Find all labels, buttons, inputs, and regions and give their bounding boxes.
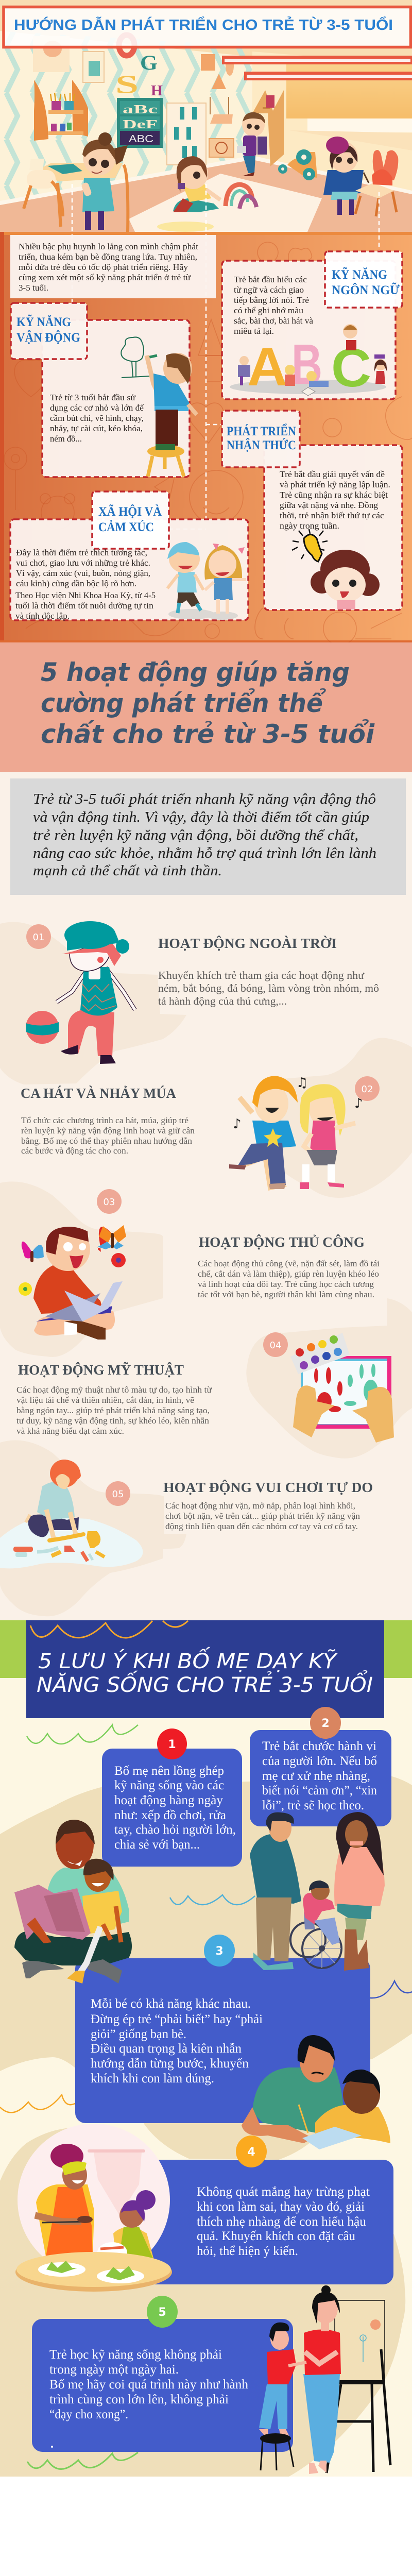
text note 4 bbox=[197, 2185, 370, 2258]
text note 4: Không quát mắng hay trừng phạt bbox=[197, 2185, 370, 2199]
text 04: vật liệu tái chế và thiên nhiên, cắt dán, in hình, vẽ bbox=[16, 1395, 194, 1405]
heading 04: HOẠT ĐỘNG MỸ THUẬT bbox=[18, 1362, 184, 1378]
girl sitting on rug bbox=[173, 156, 220, 212]
activity 01: outdoor bbox=[26, 921, 379, 1064]
text note 2: của người lớn. Nếu bố bbox=[262, 1754, 377, 1768]
text note 5: “dạy cho xong”. bbox=[49, 2408, 128, 2421]
note panel 3 bbox=[75, 1935, 370, 2123]
rug bbox=[129, 174, 322, 232]
decorative squiggle indigo bbox=[370, 1981, 412, 1998]
decorative dashed route lines bbox=[72, 184, 379, 529]
section banner: 5 life skills notes bbox=[26, 1620, 384, 1718]
text 04: Các hoạt động mỹ thuật như tô màu tự do, tạo hình từ bbox=[16, 1385, 212, 1395]
text: cognitive development: thời, trẻ nhận biết thứ tự các bbox=[280, 511, 384, 520]
badge 4: 4 bbox=[247, 2146, 255, 2159]
text note 1: tay, chào hỏi người lớn, bbox=[114, 1823, 236, 1837]
decorative squiggle orange bbox=[0, 2094, 87, 2112]
icon: children with ABC letters bbox=[230, 324, 387, 398]
text: language skills: tiếp bằng lời nói. Trẻ bbox=[234, 295, 309, 305]
heading: social and emotional: XÃ HỘI VÀ bbox=[98, 504, 162, 519]
heading 01: HOẠT ĐỘNG NGOÀI TRỜI bbox=[158, 936, 337, 951]
activity 03: crafts bbox=[19, 1189, 380, 1340]
text: language skills: sắc, bài thơ, bài hát và bbox=[234, 316, 313, 326]
badge 1: 1 bbox=[168, 1738, 176, 1751]
illustration: family with wheelchair bbox=[250, 1812, 385, 1971]
text 04: bằng ngón tay... giúp trẻ phát triển khả năng sáng tạo, bbox=[16, 1405, 210, 1415]
text note 2 bbox=[262, 1739, 377, 1812]
text 02 bbox=[21, 1115, 195, 1156]
heading: language skills: KỸ NĂNG bbox=[332, 267, 387, 282]
text: motor skills: nhảy, tự cài cút, kéo khóa, bbox=[50, 423, 143, 433]
icon: boy reading with butterflies bbox=[19, 1225, 126, 1340]
text note 5: Trẻ học kỹ năng sống không phải bbox=[49, 2348, 222, 2362]
text: motor skills: ném đồ... bbox=[50, 434, 82, 444]
decorative squiggle green bbox=[27, 1725, 138, 1744]
hanging board and peg board bbox=[210, 114, 233, 124]
number badge 05: 05 bbox=[112, 1489, 124, 1500]
wall art frames bbox=[33, 36, 70, 72]
heading: language skills: NGÔN NGỮ bbox=[332, 282, 400, 297]
icon: children singing: ♪ bbox=[233, 1116, 242, 1132]
heading 05: HOẠT ĐỘNG VUI CHƠI TỰ DO bbox=[163, 1480, 373, 1495]
text note 4: hỏi, thể hiện ý kiến. bbox=[197, 2244, 298, 2258]
section banner: 5 activities: 5 hoạt động giúp tăng bbox=[41, 657, 350, 687]
text: social and emotional bbox=[15, 548, 156, 621]
bunny chair bbox=[312, 150, 398, 216]
text note 1: chia sẻ với bạn... bbox=[114, 1838, 200, 1852]
activity 04: art bbox=[16, 1332, 394, 1443]
text note 1 bbox=[114, 1764, 236, 1852]
background doodles bbox=[4, 242, 412, 645]
decorative squiggle green bottom bbox=[27, 2452, 138, 2469]
text note 4: quả. Khuyến khích con đặt câu bbox=[197, 2229, 355, 2243]
panel: child development skills bbox=[0, 184, 412, 645]
heading: cognitive development bbox=[222, 411, 300, 467]
floor bbox=[0, 159, 412, 232]
text note 3: Điều quan trọng là kiên nhẫn bbox=[91, 2042, 242, 2056]
text: motor skills: Trẻ từ 3 tuổi bắt đầu sử bbox=[50, 393, 136, 402]
icon: children with ABC letters: A bbox=[247, 337, 287, 397]
table with paper roll bbox=[24, 159, 128, 232]
decorative banner bar top bbox=[222, 56, 412, 64]
text 01: Khuyến khích trẻ tham gia các hoạt động như bbox=[158, 969, 365, 981]
text note 1: như: xếp đồ chơi, rửa bbox=[114, 1808, 226, 1822]
text: social and emotional: Vì vậy, cảm xúc (vui, buồn, nóng giận, bbox=[16, 568, 150, 578]
panel: classroom illustration: aBc bbox=[123, 103, 158, 116]
intro text box: triển, thua kém bạn bè đồng trang lứa. Tuy nhiên, bbox=[19, 252, 197, 262]
text 05: chơi bột nặn, vẽ trên cát... giúp phát triển kỹ năng vận bbox=[165, 1511, 360, 1521]
text note 3: giỏi” giống bạn bè. bbox=[91, 2027, 186, 2041]
text note 4: khi con làm sai, thay vào đó, giải bbox=[197, 2200, 365, 2214]
icon: child playing with clay bbox=[0, 1460, 143, 1568]
section banner: 5 activities: cường phát triển thể bbox=[41, 688, 327, 718]
icon: light bulb and thinking girl bbox=[292, 529, 380, 609]
text: motor skills: dụng các cơ nhỏ và lớn để bbox=[50, 403, 144, 413]
badge 5: 5 bbox=[158, 2306, 166, 2319]
panel: classroom illustration: G bbox=[140, 51, 158, 74]
icon: children with ABC letters: C bbox=[331, 338, 371, 398]
text note 5: trong ngày một ngày hai. bbox=[49, 2363, 179, 2377]
text: cognitive development bbox=[280, 469, 390, 531]
section banner: 5 activities bbox=[0, 642, 412, 772]
text 02: bằng. Bố mẹ có thể thay phiên nhau hướng dẫn bbox=[21, 1136, 193, 1146]
icon: children with ABC letters: B bbox=[291, 333, 322, 396]
intro text box: 3-5 tuổi. bbox=[19, 283, 48, 293]
text 02: các bước và động tác cho con. bbox=[21, 1146, 128, 1156]
badge 2 bbox=[310, 1707, 341, 1739]
text 01: ném, bắt bóng, đá bóng, làm vòng tròn nhóm, mô bbox=[158, 982, 379, 994]
text note 3: Đừng ép trẻ “phải biết” hay “phải bbox=[91, 2012, 263, 2026]
number badge 05 bbox=[106, 1481, 130, 1506]
badge 4 bbox=[236, 2136, 267, 2167]
text: social and emotional: vui chơi, giao lưu với những trẻ khác. bbox=[16, 558, 150, 568]
decorative banner bar lower bbox=[244, 72, 412, 80]
panel: classroom illustration: DeF bbox=[123, 118, 158, 131]
text: language skills: từ ngữ và cách giao bbox=[234, 285, 304, 295]
heading 02: CA HÁT VÀ NHẢY MÚA bbox=[21, 1086, 176, 1101]
icon: boy and girl holding hands bbox=[167, 542, 246, 620]
note panel 5 bbox=[32, 2296, 293, 2452]
text note 4: thích nhẹ nhàng để con hiểu hậu bbox=[197, 2215, 367, 2229]
number badge 03: 03 bbox=[104, 1197, 115, 1208]
text note 1: hoạt động hàng ngày bbox=[114, 1793, 224, 1807]
text note 2: lỗi”, trẻ sẽ học theo. bbox=[262, 1799, 364, 1812]
number badge 04: 04 bbox=[270, 1340, 281, 1351]
intro text box: physical development: trẻ rèn luyện kỹ năng vận động, bồi dưỡng thể chất, bbox=[33, 827, 358, 843]
text 03 bbox=[198, 1259, 380, 1299]
badge 2: 2 bbox=[321, 1717, 330, 1730]
text note 2: Trẻ bắt chước hành vi bbox=[262, 1739, 376, 1753]
panel: classroom illustration: ABC bbox=[129, 133, 153, 145]
panel: cognitive development bbox=[222, 411, 402, 610]
text note 5: trình cùng con lớn lên, không phải bbox=[49, 2393, 229, 2406]
activity 05: free play bbox=[0, 1460, 373, 1568]
panel: activities background bbox=[0, 772, 412, 1620]
text: language skills bbox=[234, 275, 313, 336]
heading: social and emotional: CẢM XÚC bbox=[98, 520, 154, 534]
illustration: mother and son drawing on easel bbox=[259, 2285, 390, 2474]
icon: handprints and watercolor palette bbox=[290, 1333, 394, 1443]
badge 3 bbox=[204, 1935, 235, 1967]
badge 5 bbox=[147, 2296, 178, 2328]
text: motor skills: cầm bút chì, vẽ hình, chạy, bbox=[50, 413, 144, 423]
title banner bbox=[4, 7, 411, 47]
note panel 2 bbox=[250, 1707, 391, 1826]
number badge 02 bbox=[355, 1076, 380, 1101]
text note 1: Bố mẹ nên lồng ghép bbox=[114, 1764, 224, 1778]
intro text box: Nhiều bậc phụ huynh lo lắng con mình chậm phát bbox=[19, 242, 198, 251]
text: cognitive development: Trẻ cũng nhận ra sự khác biệt bbox=[280, 490, 388, 500]
icon: children singing: ♪ bbox=[354, 1096, 363, 1111]
text: cognitive development: và phát triển kỹ năng lập luận. bbox=[280, 480, 390, 489]
badge 1 bbox=[157, 1728, 187, 1759]
text: social and emotional: Đây là thời điểm trẻ thích tương tác, bbox=[16, 548, 147, 557]
section banner: 5 life skills notes: NĂNG SỐNG CHO TRẺ 3-5 TUỔI bbox=[37, 1670, 373, 1697]
intro text box: mỗi đứa trẻ đều có tốc độ phát triển riêng. Hãy bbox=[19, 262, 188, 272]
number badge 03 bbox=[97, 1189, 122, 1214]
intro text box: physical development: Trẻ từ 3-5 tuổi phát triển nhanh kỹ năng vận động thô bbox=[33, 791, 376, 807]
heading 03: HOẠT ĐỘNG THỦ CÔNG bbox=[199, 1234, 365, 1250]
butterfly pink bbox=[22, 1242, 44, 1262]
text: cognitive development: ngày trong tuần. bbox=[280, 521, 339, 531]
rainbow toy bbox=[226, 184, 256, 209]
toy on wheels bbox=[278, 149, 317, 180]
intro text box: physical development bbox=[10, 778, 406, 895]
panel: life skills background bbox=[0, 1620, 412, 2477]
text note 3: hướng dẫn từng bước, khuyến bbox=[91, 2057, 249, 2071]
note panel 1 bbox=[102, 1728, 242, 1867]
heading: motor skills: KỸ NĂNG bbox=[16, 314, 71, 329]
text 04: và khả năng biểu đạt cảm xúc. bbox=[16, 1426, 124, 1436]
intro text box: physical development: nâng cao sức khỏe, nhằm hỗ trợ quá trình lớn lên lành bbox=[33, 845, 376, 861]
icon: children singing: ♫ bbox=[296, 1075, 308, 1091]
intro text box: cùng xem xét một số kỹ năng phát triển ở trẻ từ bbox=[19, 273, 191, 282]
panel: social and emotional skills bbox=[10, 492, 248, 621]
text: language skills: Trẻ bắt đầu hiểu các bbox=[234, 275, 307, 284]
text note 1: kỹ năng sống vào các bbox=[114, 1778, 224, 1792]
text note 3: Mỗi bé có khả năng khác nhau. bbox=[91, 1997, 251, 2011]
text note 5 bbox=[49, 2348, 248, 2421]
activity 02: singing and dancing bbox=[21, 1075, 380, 1189]
butterfly orange bbox=[98, 1225, 126, 1252]
number badge 04 bbox=[263, 1332, 288, 1357]
illustration: mother and daughter cooking bbox=[15, 2124, 172, 2292]
lacing board bbox=[167, 103, 206, 165]
text note 3: khích khi con làm đúng. bbox=[91, 2072, 214, 2086]
text 04: tư duy, kỹ năng vận động tinh, sự khéo léo, kiên nhẫn bbox=[16, 1416, 210, 1426]
text: social and emotional: tuổi là thời điểm tốt nuôi dưỡng tự tin bbox=[15, 601, 154, 611]
intro text box: physical development: và vận động tinh. Vì vậy, đây là thời điểm tốt cần giúp bbox=[33, 809, 369, 825]
text: cognitive development: giữa vật nặng và nhẹ. Đồng bbox=[280, 500, 379, 510]
note panel 4 bbox=[113, 2136, 393, 2284]
illustration: father teaching son to write bbox=[242, 2035, 390, 2149]
icon: boy drawing a tree on stool bbox=[121, 337, 197, 477]
window blind bbox=[286, 64, 412, 118]
boy standing bbox=[237, 112, 265, 176]
panel: language skills bbox=[222, 251, 402, 399]
wall shapes bbox=[201, 54, 215, 71]
flowers bbox=[111, 1253, 126, 1267]
text: social and emotional: cáu kỉnh) cũng dần bộc lộ rõ hơn. bbox=[16, 579, 136, 588]
section banner: 5 life skills notes: 5 LƯU Ý KHI BỐ MẸ DẠY KỸ bbox=[38, 1646, 338, 1673]
heading: social and emotional bbox=[92, 492, 169, 549]
intro text box bbox=[10, 235, 216, 298]
heading: cognitive development: PHÁT TRIỂN bbox=[227, 423, 296, 438]
title banner: HƯỚNG DẪN PHÁT TRIỂN CHO TRẺ TỪ 3-5 TUỔI bbox=[14, 16, 393, 33]
icon: boy kicking ball bbox=[26, 921, 135, 1064]
section banner: 5 activities: chất cho trẻ từ 3-5 tuổi bbox=[41, 719, 375, 749]
text: language skills: có thể ghi nhớ màu bbox=[234, 306, 304, 315]
illustration: father and child reading bbox=[14, 1820, 132, 1984]
text: motor skills bbox=[50, 393, 144, 444]
text: social and emotional: và tính độc lập. bbox=[15, 611, 70, 621]
heading: motor skills: VẬN ĐỘNG bbox=[16, 330, 80, 345]
small dot bbox=[51, 2446, 53, 2448]
panel: motor skills bbox=[11, 303, 197, 477]
text note 5: Bố mẹ hãy coi quá trình này như hành bbox=[49, 2378, 248, 2392]
text 01: tả hành động của thú cưng,... bbox=[158, 995, 287, 1007]
wall letters bbox=[119, 35, 134, 56]
text: cognitive development: Trẻ bắt đầu giải quyết vấn đề bbox=[280, 469, 385, 479]
shelf bbox=[34, 80, 88, 141]
text note 2: biết nói “cảm ơn”, “xin bbox=[262, 1784, 377, 1798]
text 04 bbox=[16, 1385, 212, 1436]
text note 2: mẹ cư xử nhẹ nhàng, bbox=[262, 1769, 370, 1783]
text 05: Các hoạt động như vặn, mở nắp, phân loại hình khối, bbox=[165, 1501, 355, 1511]
text 05: động tinh liên quan đến các nhóm cơ tay và cơ cổ tay. bbox=[165, 1521, 358, 1531]
panel: classroom illustration bbox=[0, 0, 412, 232]
heading: language skills bbox=[325, 251, 402, 308]
panel: classroom illustration: H bbox=[151, 83, 163, 99]
text 03: và linh hoạt của đôi tay. Trẻ cũng học cách tương bbox=[198, 1279, 374, 1289]
text 02: Tổ chức các chương trình ca hát, múa, giúp trẻ bbox=[21, 1115, 188, 1125]
decorative squiggle blue bbox=[170, 1895, 255, 1905]
number badge 02: 02 bbox=[362, 1084, 373, 1095]
text 03: tác tốt với bạn bè, người thân khi làm cùng nhau. bbox=[198, 1290, 374, 1299]
text 05 bbox=[165, 1501, 360, 1531]
heading: motor skills bbox=[11, 303, 87, 359]
icon: children singing bbox=[229, 1075, 363, 1189]
text note 3 bbox=[91, 1997, 263, 2086]
text 03: Các hoạt động thủ công (vẽ, nặn đất sét, làm đồ tái bbox=[198, 1259, 380, 1268]
wooden cabinet bbox=[252, 90, 284, 166]
text 01 bbox=[158, 969, 379, 1007]
girl with beret bbox=[323, 137, 369, 215]
heading: cognitive development: NHẬN THỨC bbox=[227, 438, 296, 452]
text 03: chế, cắt dán và làm thiệp), giúp rèn luyện khéo léo bbox=[198, 1269, 379, 1279]
panel: classroom illustration: S bbox=[115, 70, 139, 98]
girl painting at table bbox=[81, 132, 128, 230]
number badge 01: 01 bbox=[33, 932, 44, 943]
blackboard bbox=[117, 98, 163, 148]
intro text box: physical development: mạnh cả thể chất và tinh thần. bbox=[33, 862, 222, 879]
text: language skills: miêu tả lại. bbox=[234, 326, 274, 336]
text: social and emotional: Theo Học viện Nhi Khoa Hoa Kỳ, từ 4-5 bbox=[15, 590, 156, 600]
badge 3: 3 bbox=[215, 1945, 224, 1958]
number badge 01 bbox=[26, 924, 51, 949]
text 02: rèn luyện kỹ năng vận động linh hoạt và giữ cân bbox=[21, 1126, 195, 1136]
